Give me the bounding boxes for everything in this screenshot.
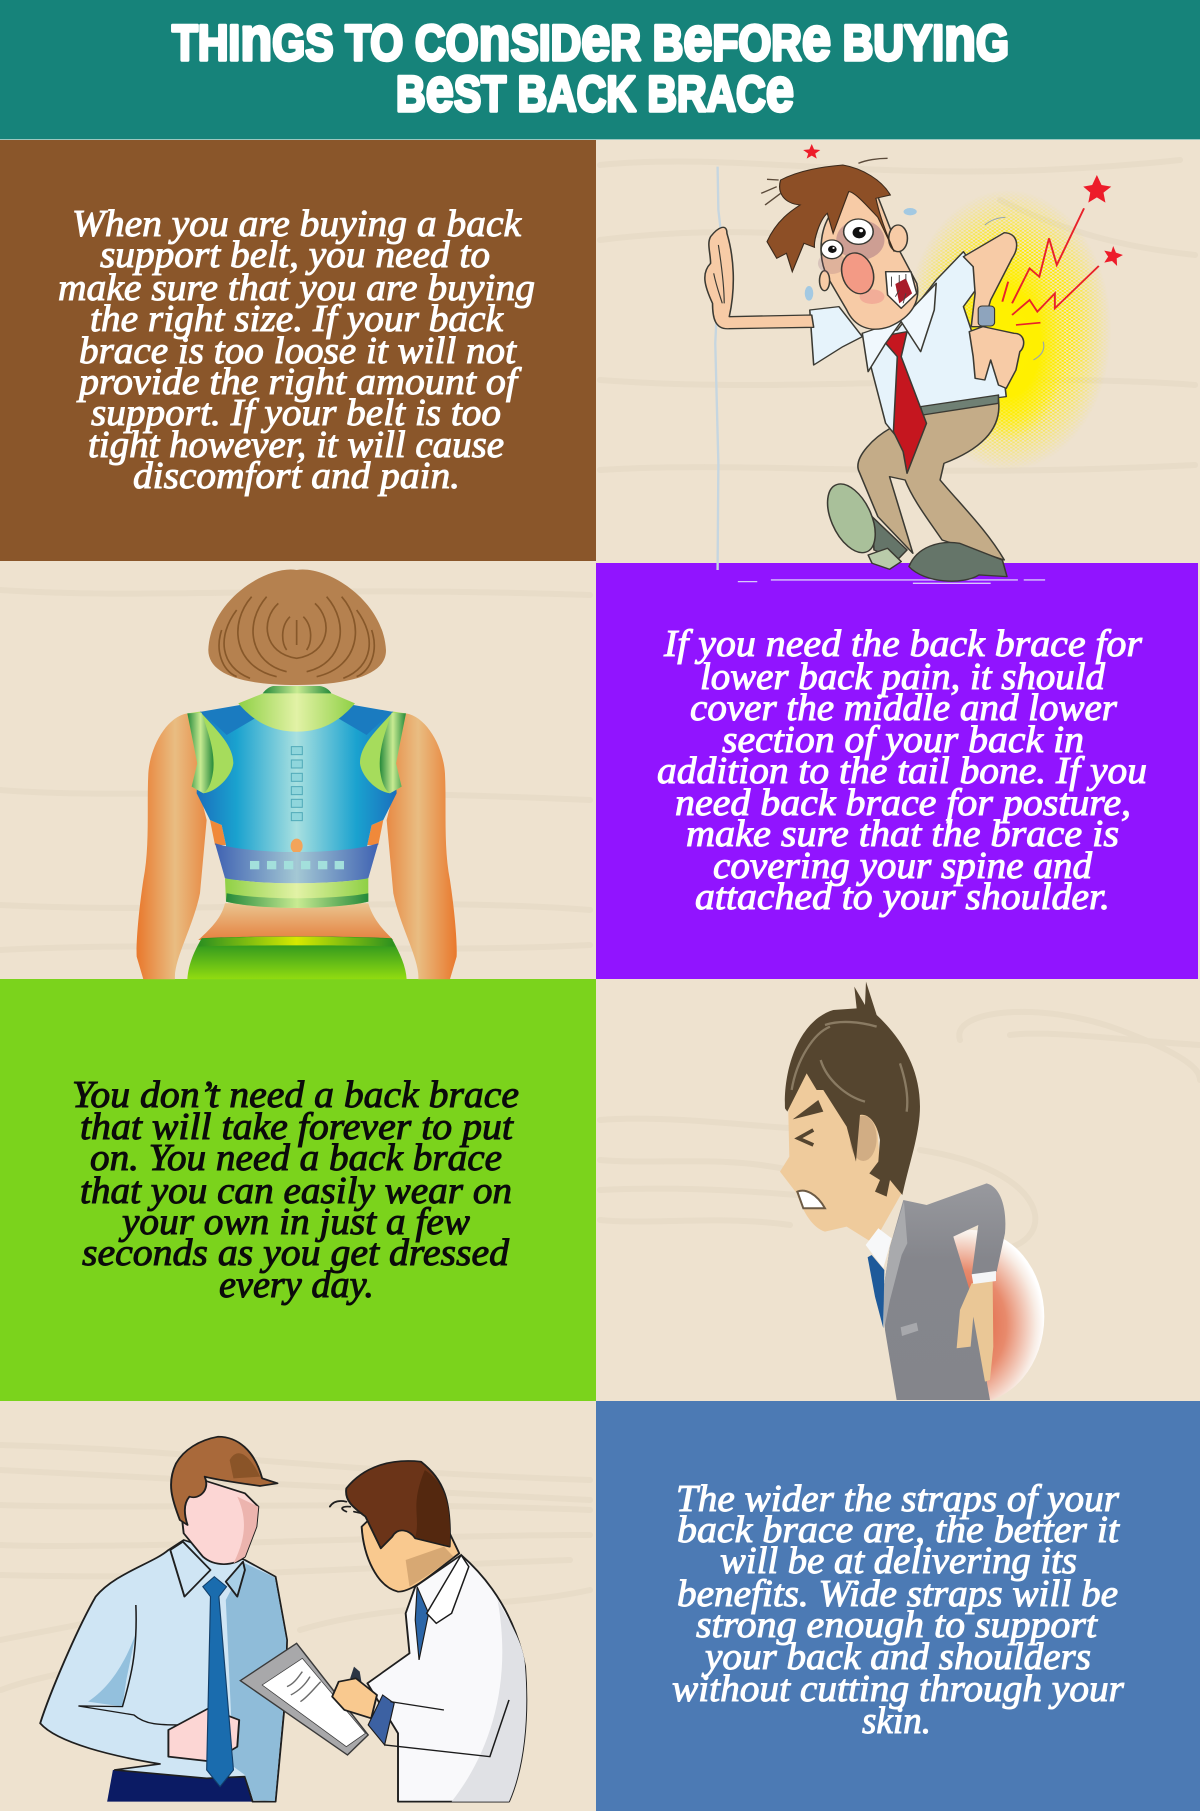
waist belt [225,878,368,908]
text: easy to put on: that you can easily wear on [80,1170,512,1212]
text: easy to put on [72,1074,519,1306]
tie [868,1255,884,1328]
hair strands [219,597,374,678]
side orange pieces [210,820,383,845]
neck band [263,686,332,694]
doctor hair [346,1461,450,1548]
wall hand fingers [714,245,724,303]
hand on the back [969,327,1024,388]
panel: easy to wear text [0,979,596,1401]
text: easy to put on: your own in just a few [118,1201,471,1243]
pants [858,400,1004,560]
cuff [972,1271,996,1284]
text: buying the right size: the right size. If your back [90,298,504,340]
patient shirt [40,1540,287,1802]
head [761,158,918,329]
patient trousers [107,1770,258,1802]
text: lower back and posture coverage: attached to your shoulder. [695,876,1110,918]
patient head [180,1480,258,1564]
collar [170,1542,210,1597]
illustration: patient consulting a doctor [40,1437,526,1802]
clipboard [240,1643,368,1755]
text: buying the right size: support. If your belt is too [91,392,501,434]
cheek blush [860,289,884,304]
hair [767,165,894,272]
panel: wide straps text [596,1401,1200,1811]
text: easy to put on: on. You need a back brace [90,1137,502,1179]
text: buying the right size: provide the right amount of [76,361,522,403]
text: buying the right size: make sure that you are buying [58,267,535,309]
mouth [886,272,917,308]
text: buying the right size: brace is too loose it will not [79,330,517,372]
spine squares [291,747,302,821]
hair [785,982,920,1197]
eyebrow [793,1100,823,1119]
text: wider straps: benefits. Wide straps will be [677,1573,1118,1615]
pain lightning [1002,208,1099,325]
yoke [238,693,355,732]
text: wider straps: without cutting through your [672,1668,1124,1710]
panel: right size text [0,140,596,561]
text: lower back and posture coverage: make sure that the brace is [686,813,1119,855]
patient [40,1437,287,1802]
shoes [818,479,1007,581]
left strap [187,712,233,793]
text: lower back and posture coverage: cover the middle and lower [690,687,1117,729]
dark shoulder areas [202,705,392,735]
arm on the wall [705,227,814,329]
eye [798,1130,813,1145]
doctor [240,1461,526,1802]
waist [198,903,393,940]
pocket [901,1323,918,1336]
hand [957,1278,993,1382]
shirt shadow [226,1563,286,1801]
text: buying the right size: When you are buying a back [72,203,522,245]
text: easy to put on: every day. [219,1264,374,1306]
nose [837,250,878,296]
face and neck [780,1073,902,1243]
doctor pen [350,1667,362,1683]
text: lower back and posture coverage: need back brace for posture, [675,782,1131,824]
doctor neck and tie [415,1587,429,1660]
doctor coat [367,1555,526,1802]
text: wider straps: your back and shoulders [701,1636,1091,1678]
title: THInGS TO COnSIDeR BeFORe BUYInG [172,5,1009,74]
collar [866,1228,892,1268]
illustration: woman wearing posture brace [137,570,457,979]
shirt [862,252,1006,457]
text: lower back and posture coverage: addition to the tail bone. If you [657,750,1147,792]
pain burst [905,190,1111,470]
text: wider straps: will be at delivering its [720,1540,1077,1582]
doctor hand [332,1678,377,1718]
title [172,5,1009,125]
ear [850,1116,877,1161]
text: easy to put on: You don’t need a back brace [72,1074,519,1116]
arms [137,713,207,979]
hair [208,570,386,685]
belt [921,395,998,415]
skirt [187,937,407,979]
lower band [215,843,378,883]
text: wider straps: skin. [862,1700,931,1742]
stars [803,144,1123,266]
doctor cuff [368,1695,394,1745]
text: lower back and posture coverage: If you need the back brace for [663,623,1142,665]
orange clasp [291,839,303,853]
sleeve [810,307,862,365]
text: easy to put on: seconds as you get dressed [82,1232,510,1274]
panel: cover the right section text [596,563,1198,979]
eyes [836,220,884,260]
sweat drops [805,208,917,301]
text: lower back and posture coverage [657,623,1147,918]
text: wider straps: back brace are, the better it [677,1509,1121,1551]
title: BeST BACK BRACe [396,56,794,125]
text: lower back and posture coverage: lower back pain, it should [700,656,1106,698]
lapel [883,1202,907,1328]
mouth [797,1191,825,1208]
text: wider straps [672,1478,1124,1742]
right strap [360,712,406,793]
doctor head [362,1507,459,1592]
fist [168,1708,239,1762]
text: buying the right size: discomfort and pain. [133,455,460,497]
text: wider straps: The wider the straps of your [676,1478,1119,1520]
arm on the back [963,233,1017,327]
text: lower back and posture coverage: section of your back in [722,719,1084,761]
watch [978,306,995,326]
back pain glow [954,1230,1044,1400]
clipboard paper [262,1658,365,1747]
header banner [0,0,1200,140]
suit [883,1183,1005,1400]
text: buying the right size: support belt, you need to [100,234,490,276]
text: easy to put on: that will take forever to put [80,1106,514,1148]
patient hair [171,1437,277,1525]
illustration: man with back pain at the wall [705,144,1123,583]
text: wider straps: strong enough to support [696,1604,1099,1646]
text: buying the right size: tight however, it will cause [88,424,504,466]
illustration: man in grey suit holding his back [780,982,1044,1403]
wall line [715,167,721,570]
band squares [250,861,344,869]
tie [203,1577,233,1787]
collar [862,283,936,372]
floor highlight [738,580,1045,583]
text: lower back and posture coverage: covering your spine and [713,845,1093,887]
hair highlights [792,1022,907,1112]
brace back [197,712,397,880]
tie [880,332,926,473]
text: buying the right size [58,203,535,497]
